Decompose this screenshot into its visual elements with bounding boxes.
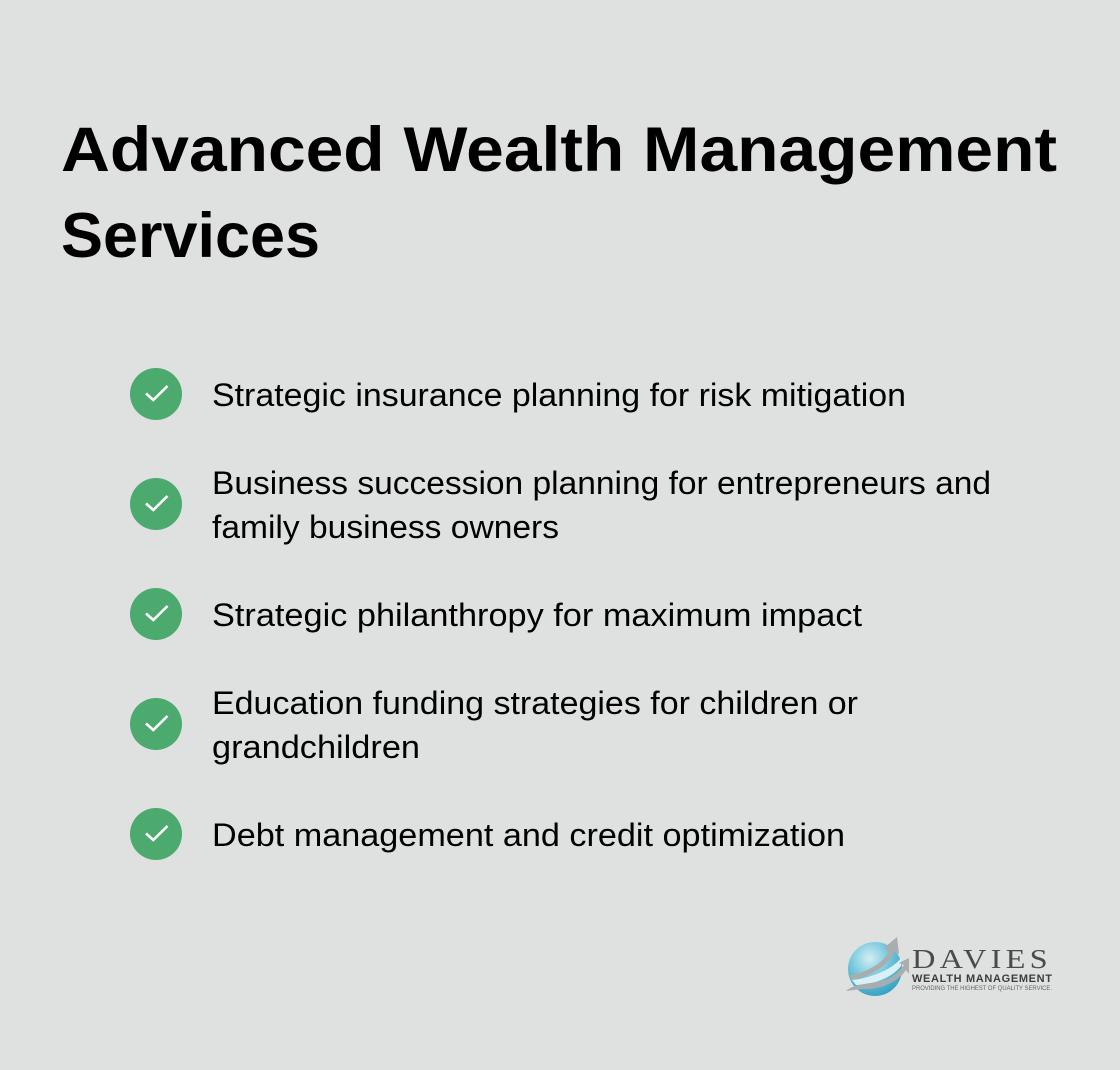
list item: business succession: family business owners <box>212 509 559 545</box>
title: Services <box>61 201 320 271</box>
list item: business succession: Business succession planning for entrepreneurs and <box>212 465 991 501</box>
list item: business succession <box>130 465 991 545</box>
list item: debt management: Debt management and credit optimization <box>212 817 845 853</box>
list item: insurance planning <box>130 368 906 420</box>
checklist <box>130 368 991 860</box>
title: Advanced Wealth Management <box>61 115 1057 185</box>
list item: education funding: grandchildren <box>212 729 420 765</box>
icon: globe with arrows <box>846 937 909 996</box>
list item: philanthropy <box>130 588 862 640</box>
logo subtitle: WEALTH MANAGEMENT <box>912 973 1052 985</box>
list item: insurance planning: Strategic insurance planning for risk mitigation <box>212 377 906 413</box>
logo wordmark: DAVIES <box>912 944 1052 974</box>
logo tagline: PROVIDING THE HIGHEST OF QUALITY SERVICE. <box>912 986 1052 992</box>
title <box>61 115 1057 271</box>
list item: education funding <box>130 685 858 765</box>
list item: debt management <box>130 808 845 860</box>
logo: Davies Wealth Management <box>846 937 1052 996</box>
list item: philanthropy: Strategic philanthropy for maximum impact <box>212 597 862 633</box>
list item: education funding: Education funding strategies for children or <box>212 685 858 721</box>
